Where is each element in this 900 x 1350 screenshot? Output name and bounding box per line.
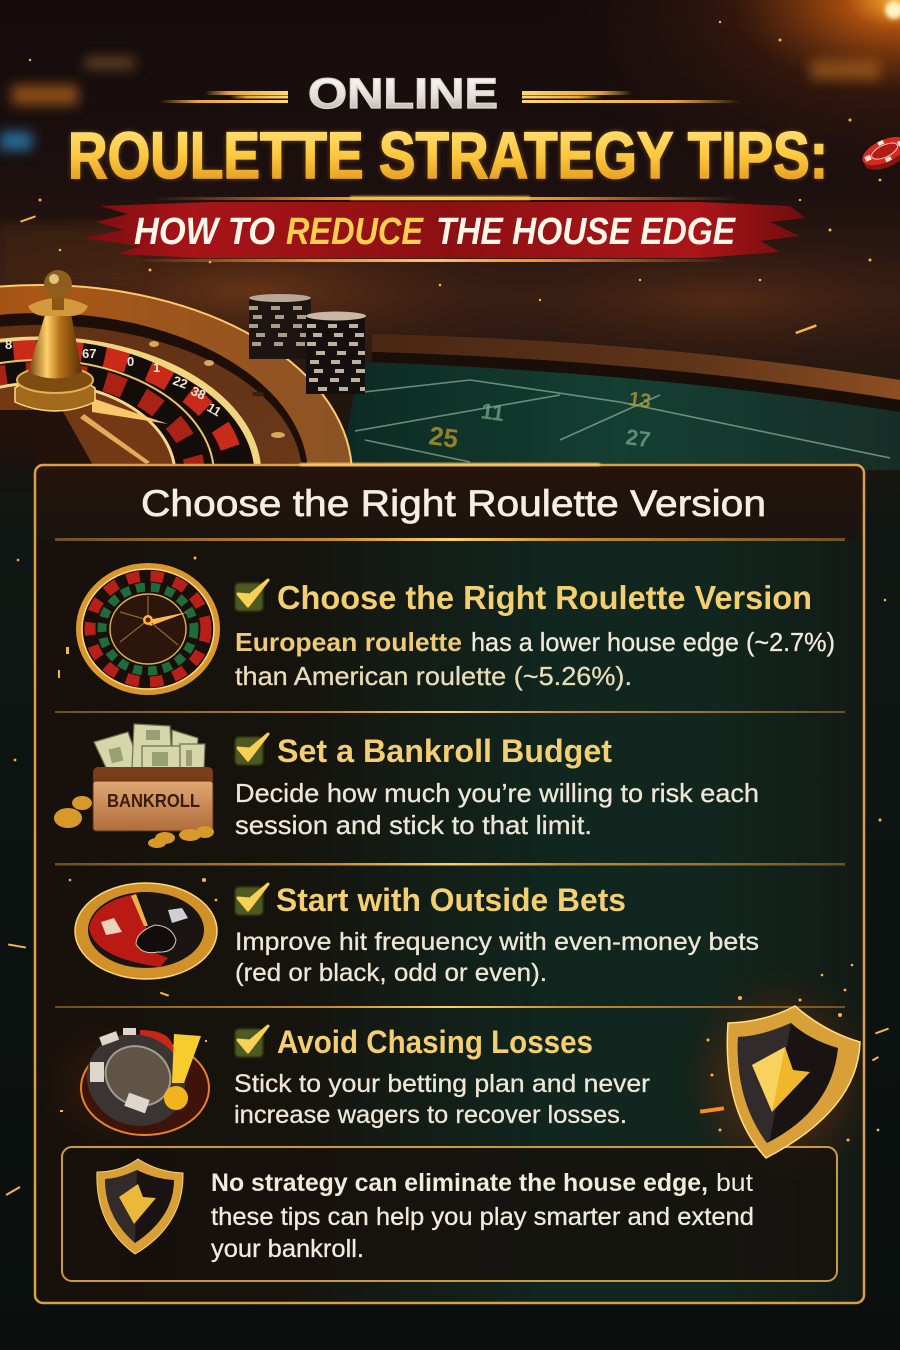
subtitle banner: HOW TO — [134, 211, 275, 253]
table numbers: 27 — [624, 424, 652, 452]
row title: Start with Outside Bets — [276, 882, 626, 918]
icon: small shield — [97, 1159, 183, 1254]
roulette wheel: 38 — [189, 383, 208, 403]
poker chip top right — [858, 131, 900, 176]
stacks of chips — [249, 294, 366, 394]
row text — [235, 627, 835, 691]
title: online: ONLINE — [308, 70, 498, 118]
row text: increase wagers to recover losses. — [234, 1101, 627, 1129]
row text: (red or black, odd or even). — [235, 959, 547, 987]
icon: roulette wheel — [76, 563, 220, 695]
checkmark — [235, 734, 268, 765]
roulette wheel: 0 — [127, 354, 134, 369]
roulette table felt — [340, 334, 900, 470]
turret — [15, 270, 95, 411]
row text: European roulette — [235, 627, 462, 657]
panel heading: Choose the Right Roulette Version — [141, 483, 766, 524]
roulette wheel: 22 — [171, 373, 190, 392]
roulette wheel: 67 — [82, 346, 96, 361]
icon: betting chip — [75, 883, 217, 979]
row text: has a lower house edge (~2.7%) — [471, 627, 835, 657]
row 1: choose version — [76, 563, 835, 695]
subtitle banner: THE HOUSE EDGE — [436, 211, 736, 253]
row text: session and stick to that limit. — [235, 810, 592, 840]
row text — [234, 1070, 650, 1129]
row 2: bankroll — [54, 724, 759, 848]
table numbers: 13 — [627, 388, 652, 413]
footer text: your bankroll. — [211, 1235, 364, 1263]
roulette wheel: 1 — [153, 360, 160, 375]
row 4: chasing losses — [72, 1018, 650, 1142]
icon: bankroll wallet: BANKROLL — [107, 791, 200, 811]
subtitle banner: REDUCE — [286, 211, 424, 253]
table numbers: 25 — [427, 420, 460, 454]
row text: than American roulette (~5.26%). — [235, 661, 632, 691]
checkmark — [235, 884, 268, 915]
subtitle banner — [84, 196, 806, 262]
roulette wheel: 11 — [204, 400, 224, 419]
sparks in panel — [58, 556, 879, 1142]
row text: Decide how much you’re willing to risk each — [235, 778, 759, 808]
main panel — [30, 463, 885, 1303]
icon: bankroll wallet — [54, 724, 214, 848]
row title: Avoid Chasing Losses — [277, 1024, 593, 1060]
roulette wheel — [0, 270, 352, 466]
roulette wheel: 8 — [5, 337, 12, 352]
table numbers — [427, 388, 652, 454]
title: online — [160, 70, 740, 118]
footer note — [62, 1147, 837, 1281]
footer text: these tips can help you play smarter and extend — [211, 1203, 754, 1231]
table numbers: 11 — [479, 398, 506, 426]
checkmark — [235, 580, 268, 611]
icon: large shield — [727, 1006, 860, 1158]
row 3: outside bets — [75, 882, 759, 987]
row title: Choose the Right Roulette Version — [277, 579, 812, 616]
row text — [235, 778, 759, 840]
row text: Improve hit frequency with even-money bets — [235, 928, 759, 956]
footer text — [211, 1169, 754, 1263]
row text — [235, 928, 759, 987]
icon: chip with warning — [72, 1018, 209, 1142]
footer text: No strategy can eliminate the house edge, — [211, 1169, 708, 1197]
row text: Stick to your betting plan and never — [234, 1070, 650, 1098]
footer text: but — [716, 1169, 753, 1197]
row title: Set a Bankroll Budget — [277, 733, 612, 769]
checkmark — [235, 1026, 268, 1057]
